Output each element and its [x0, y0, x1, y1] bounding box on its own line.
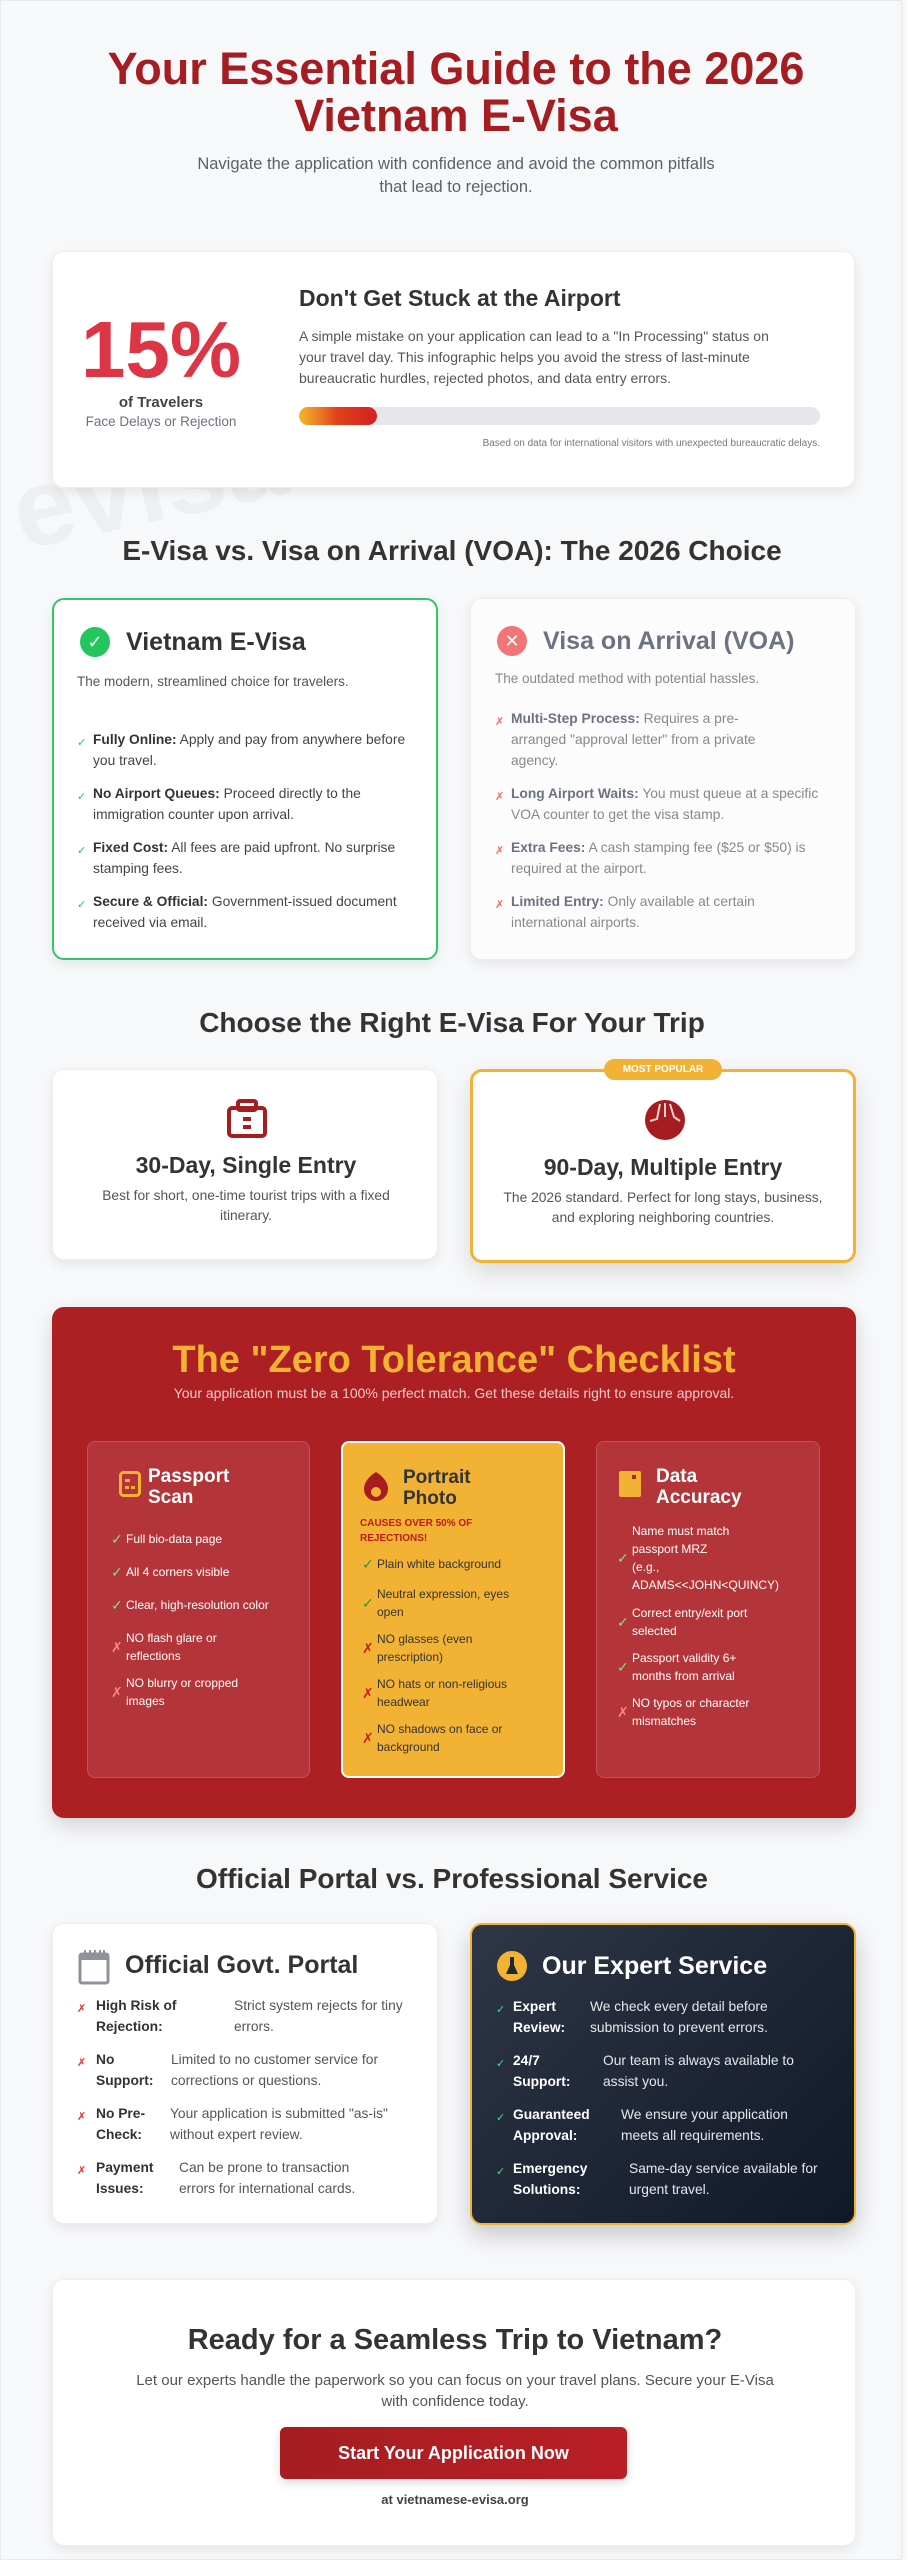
list: arranged "approval letter" from a private	[511, 732, 755, 747]
list: months from arrival	[632, 1669, 735, 1683]
icon: check circle	[80, 627, 110, 657]
heading: choose e-visa: Choose the Right E-Visa For Your Trip	[199, 1007, 705, 1038]
list: ✓	[77, 845, 86, 857]
paragraph: your travel day. This infographic helps you avoid the stress of last-minute	[299, 349, 750, 365]
icon: person	[364, 1472, 388, 1501]
list	[496, 1999, 818, 2197]
card: data accuracy	[596, 1441, 820, 1778]
note: Based on data for international visitors with unexpected bureaucratic delays.	[483, 438, 820, 449]
icon: badge	[497, 1951, 527, 1981]
button: Start Your Application Now	[338, 2443, 569, 2463]
panel: call to action	[52, 2279, 856, 2546]
icon: passport	[119, 1471, 141, 1497]
title: The "Zero Tolerance" Checklist	[172, 1339, 736, 1381]
button	[280, 2427, 627, 2479]
list: Passport validity 6+	[632, 1651, 736, 1665]
list: ✗	[495, 845, 504, 857]
list: Same-day service available for urgent travel.	[629, 2161, 818, 2197]
list: ✗	[77, 2057, 86, 2069]
card: passport scan	[87, 1441, 310, 1778]
title: Your Essential Guide to the 2026	[108, 43, 804, 94]
heading: portal vs service: Official Portal vs. Professional Service	[196, 1863, 708, 1894]
list: ✓	[77, 899, 86, 911]
list: ✗	[495, 791, 504, 803]
list: Approval:	[513, 2128, 577, 2143]
list: Payment	[96, 2160, 154, 2175]
description: The outdated method with potential hassles.	[495, 671, 759, 686]
warning: CAUSES OVER 50% OF	[360, 1518, 472, 1529]
subtitle: that lead to rejection.	[379, 178, 533, 196]
list: NO hats or non-religious	[377, 1677, 507, 1691]
list: Secure & Official: Government-issued document received via email.	[93, 894, 397, 930]
list: ✓	[111, 1597, 123, 1613]
icon: suitcase	[227, 1099, 267, 1138]
paragraph	[299, 328, 769, 386]
warning	[360, 1518, 472, 1544]
list	[77, 732, 405, 930]
list	[77, 1998, 403, 2196]
icon: document	[619, 1471, 641, 1497]
title	[148, 1466, 230, 1508]
icon: x circle: ✕	[504, 631, 520, 651]
paragraph: bureaucratic hurdles, rejected photos, and data entry errors.	[299, 370, 671, 386]
list: Name must match	[632, 1524, 729, 1538]
title	[108, 43, 804, 141]
list: ✓	[77, 737, 86, 749]
list: ✗	[77, 2111, 86, 2123]
icon: x circle	[497, 626, 527, 656]
title: Portrait	[403, 1467, 471, 1488]
list: ✓	[362, 1595, 374, 1611]
panel: 30-day	[52, 1069, 438, 1260]
big stat: Face Delays or Rejection	[86, 414, 236, 429]
list: prescription)	[377, 1650, 443, 1664]
list: ✓	[496, 2004, 505, 2016]
list: ✗	[495, 716, 504, 728]
subtitle: Your application must be a 100% perfect match. Get these details right to ensure approval.	[174, 1385, 734, 1401]
heading: Don't Get Stuck at the Airport	[299, 285, 621, 311]
list: reflections	[126, 1649, 181, 1663]
list: ✓	[617, 1659, 629, 1675]
list: ✓	[77, 791, 86, 803]
list: ✗	[111, 1684, 123, 1700]
list: Strict system rejects for tiny errors.	[234, 1998, 403, 2034]
list: ✓	[617, 1550, 629, 1566]
big stat: 15%	[81, 305, 241, 394]
list: ✗	[362, 1685, 374, 1701]
text: Let our experts handle the paperwork so you can focus on your travel plans. Secure your E-Visa with confidence today.	[136, 2372, 774, 2410]
title: 90-Day, Multiple Entry	[544, 1154, 782, 1180]
list: NO typos or character	[632, 1696, 749, 1710]
list: Solutions:	[513, 2182, 580, 2197]
list: Fully Online: Apply and pay from anywhere before you travel.	[93, 732, 405, 768]
list: Extra Fees: A cash stamping fee ($25 or $50) is required at the airport.	[511, 840, 806, 876]
list: No Pre-	[96, 2106, 145, 2121]
panel: visa on arrival	[470, 598, 856, 960]
list: Issues:	[96, 2181, 144, 2196]
list: High Risk of	[96, 1998, 176, 2013]
list: No	[96, 2052, 114, 2067]
list: Limited to no customer service for corrections or questions.	[171, 2052, 378, 2088]
big stat: of Travelers	[119, 394, 203, 411]
panel: our expert service	[470, 1923, 856, 2225]
description: Best for short, one-time tourist trips with a fixed itinerary.	[102, 1188, 390, 1223]
panel: stat card	[52, 251, 855, 488]
title: Vietnam E-Visa	[126, 628, 306, 656]
list: background	[377, 1740, 440, 1754]
list: Guaranteed	[513, 2107, 590, 2122]
list: images	[126, 1694, 165, 1708]
heading: evisa vs voa: E-Visa vs. Visa on Arrival (VOA): The 2026 Choice	[122, 535, 782, 566]
title: Ready for a Seamless Trip to Vietnam?	[188, 2324, 722, 2356]
title: Vietnam E-Visa	[294, 90, 618, 141]
list: ✗	[77, 2003, 86, 2015]
panel: zero tolerance checklist	[52, 1307, 856, 1818]
progress bar	[299, 407, 820, 425]
list: NO flash glare or	[126, 1631, 217, 1645]
list	[362, 1556, 509, 1754]
description: The modern, streamlined choice for travelers.	[77, 674, 349, 689]
list: Emergency	[513, 2161, 587, 2176]
title: Scan	[148, 1487, 193, 1508]
list: ✗	[362, 1730, 374, 1746]
list: Rejection:	[96, 2019, 163, 2034]
panel: 90-day	[470, 1069, 856, 1263]
list: ✗	[495, 899, 504, 911]
list: Full bio-data page	[126, 1532, 222, 1546]
title: Our Expert Service	[542, 1952, 767, 1980]
list: Support:	[513, 2074, 570, 2089]
list: We check every detail before submission to prevent errors.	[590, 1999, 768, 2035]
list: Limited Entry: Only available at certain international airports.	[511, 894, 755, 930]
description: The 2026 standard. Perfect for long stays, business, and exploring neighboring countries.	[503, 1190, 823, 1225]
title: Photo	[403, 1488, 457, 1509]
list: ADAMS<<JOHN<QUINCY)	[632, 1578, 779, 1592]
list: Correct entry/exit port	[632, 1606, 747, 1620]
panel: vietnam e-visa	[52, 598, 438, 960]
list	[495, 711, 818, 930]
list: selected	[632, 1624, 677, 1638]
list: NO glasses (even	[377, 1632, 472, 1646]
list: Fixed Cost: All fees are paid upfront. No surprise stamping fees.	[93, 840, 395, 876]
list: Clear, high-resolution color	[126, 1598, 269, 1612]
list: We ensure your application meets all requirements.	[621, 2107, 788, 2143]
list: agency.	[511, 753, 558, 768]
paragraph: A simple mistake on your application can lead to a "In Processing" status on	[299, 328, 769, 344]
title: Accuracy	[656, 1487, 742, 1508]
list: ✓	[617, 1614, 629, 1630]
card: portrait photo	[341, 1441, 565, 1778]
list: Your application is submitted "as-is" without expert review.	[170, 2106, 388, 2142]
list: ✓	[111, 1531, 123, 1547]
list: open	[377, 1605, 404, 1619]
icon: globe	[645, 1100, 685, 1140]
icon: calendar	[78, 1950, 110, 1984]
list: Long Airport Waits: You must queue at a specific VOA counter to get the visa stamp.	[511, 786, 818, 822]
subtitle	[197, 155, 715, 196]
list: ✗	[77, 2165, 86, 2177]
list: Multi-Step Process: Requires a pre-	[511, 711, 739, 726]
list: headwear	[377, 1695, 430, 1709]
warning: REJECTIONS!	[360, 1533, 427, 1544]
list: ✓	[496, 2166, 505, 2178]
icon: check circle: ✓	[87, 632, 103, 652]
title	[656, 1466, 742, 1508]
list: ✗	[617, 1704, 629, 1720]
list: Check:	[96, 2127, 142, 2142]
website: at vietnamese-evisa.org	[381, 2492, 529, 2507]
title	[403, 1467, 471, 1509]
title: 30-Day, Single Entry	[136, 1152, 356, 1178]
list: (e.g.,	[632, 1560, 659, 1574]
list	[111, 1531, 269, 1708]
list: Neutral expression, eyes	[377, 1587, 509, 1601]
list: ✓	[496, 2058, 505, 2070]
list: ✓	[362, 1556, 374, 1572]
list: mismatches	[632, 1714, 696, 1728]
list: ✗	[362, 1640, 374, 1656]
list: ✓	[496, 2112, 505, 2124]
panel: official govt portal	[52, 1923, 438, 2224]
title: Data	[656, 1466, 697, 1487]
list: NO blurry or cropped	[126, 1676, 238, 1690]
badge: most popular: MOST POPULAR	[623, 1064, 703, 1075]
list: ✓	[111, 1564, 123, 1580]
list: Expert	[513, 1999, 556, 2014]
list: ✗	[111, 1639, 123, 1655]
title: Visa on Arrival (VOA)	[543, 627, 794, 655]
title: Official Govt. Portal	[125, 1951, 358, 1979]
title: Passport	[148, 1466, 229, 1487]
subtitle: Navigate the application with confidence and avoid the common pitfalls	[197, 155, 715, 173]
list: NO shadows on face or	[377, 1722, 502, 1736]
badge: most popular	[604, 1059, 722, 1080]
list: Can be prone to transaction errors for international cards.	[179, 2160, 355, 2196]
list: Plain white background	[377, 1557, 501, 1571]
list: 24/7	[513, 2053, 540, 2068]
list: No Airport Queues: Proceed directly to the immigration counter upon arrival.	[93, 786, 361, 822]
list: passport MRZ	[632, 1542, 707, 1556]
watermark: evisa	[1, 396, 296, 573]
list: All 4 corners visible	[126, 1565, 229, 1579]
list: Support:	[96, 2073, 153, 2088]
list: Our team is always available to assist you.	[603, 2053, 794, 2089]
list: Review:	[513, 2020, 565, 2035]
list	[617, 1524, 779, 1728]
